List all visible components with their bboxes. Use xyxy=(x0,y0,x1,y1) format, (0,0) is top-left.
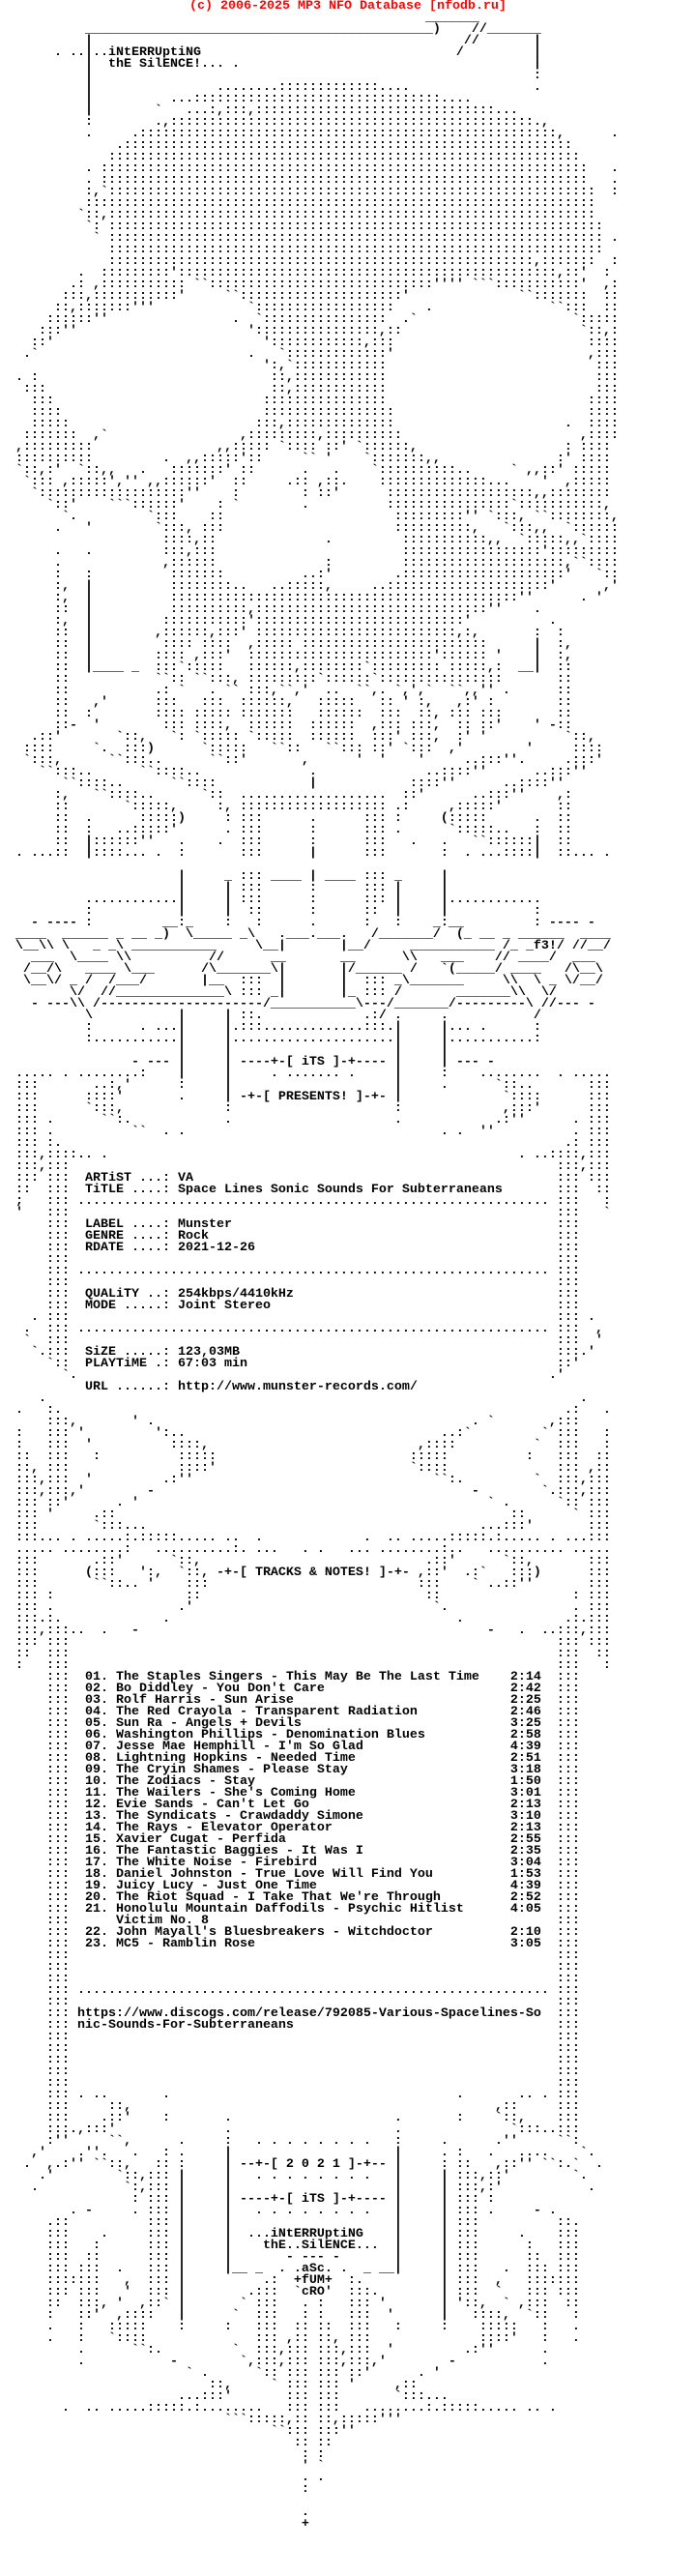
ascii art: skull with tagline: _______ _____________________________________________) //_______ | // | . ..|..iNtERRUptiNG / | | thE SilENCE!... . | | : | ........:::::::::::::.... . | ...::::::::::::::::::::::::::::::::.... | ` ...:,:::,:::::::::::::::::::::::::::::::... : .,:::::::::::::::::::::::::::::::::::::::::::::::., . .::::::::::::::::::::::::::::::::::::::::::::::::::::::, . .:::::::::::::::::::::::::::::::::::::::::::::::::::::::::: ::::::::::::::::::::::::::::::::::::::::::::::::::::::::::::: . ::::::::::::::::::::::::::::::::::::::::::::::::::::::::::::::: . . ::::::::::::::::::::::::::::::::::::::::::::::::::::::::::::::: . :,`::::::::::::::::::::::::::::::::::::::::::::::::::::::::::::::: : :::::::::::::::::::::::::::::::::::::::::::::::::::::::::::::::::: `::,::::::::::::::::::::::::::::::::::::::::::::::::::::::::::::::: `: :::::::::::::::::::::::::::::::::::::::::::::::::::::::::::::::: ` :::::::::::::::::::::::::::::::::::::::::::::::::::::::::::::::: . :::::::::::::::::::::::::::::::::::::::::::::::::::::::::::::::: :::::::::::::::::::::::::::::::::::::::::::::::::::::::,::::::: : . :::::::::':::::::::::::::::::::::::::::::::::::::::::::::::,::' : .: ,::::::::::: ``:::::::::::::::::::::::::::::'''' ```:::::::::::' ,: :::,:::::::::::' ``:::::::::::::::::::::' ``::::::: :: ::,:::::::''' `:::::::::::::::::: . ``::: :: ::::::'' . `:::::::::::::::: .` `::::: :::'' '::::::::::::::::,:: `::,: ::' '::::::::::::,::: :::: .` . `:::::::::::::' ,::: ':,`:::::::::::: ::: . : ::,:::::::::::: ::: ::: ::,:::::::::::: ::: ::: :::::::::::::::: :::: :::: ::::::::::::::::: :::: ::::: :::,:::::::::::::: . :::: ::::::: ,` ,:::::::::,:::::::::: ,:::: ,::::::::: ,,::::: `:::: ::' `::::::, : :::: :::::::::: . ,,:::::':: `` ' `:::::::,, :' :::: `::,:' `::,, . :::::::' :: . . `::::::::::.. ` ,,::' ::::: `::: ,:::::','' ,,::::::' :: .:: ,::. ::::::::::::::... ' ,::::: `:::::::::::::::::::'' : : ::' :::::::::::::::::::,,:::::::: `::' ```::::::' : ` . ::::::::::::::::`:::::::::::, `. `::: :: :::::::::'' `:::, ``::::::::, . ' `:::, ::: ::::::::::, `:::,, `:::::: ::::,:: . :::::::::::,, `:::::,,`:::: . . :::,::: ::::::::::::::::::'::::::::: . ,:::::: : :::::::::::::::::::::,``:::: : : ::::::: ..:' .:::::::::::::::::::::' `:: :, | ::::::::.. ..:::::, ..:::::::::::::::::::::' ,' :, | :::::::::::::::::::::::::::::::::::::::::::::'' . ' :: | ::::::::::,::::::::::::::::::::::::::::::'' . :, | :::::::::::':::::::::::::::::::::::::::' . :: | ,::::::,:::' ::::::::::::::::::::::::::,:, : : :: | :::: :::: ,::::: :::::::::::::::::::::::: | :, :: | :::: ,:::' ::::::::::::::::::::::::':::::: ' | :, :: |____ _ :::`::::: ::::::,::::::::`::::::::: :::::,: __| :: :: ``:: ``:::, :::::::::`::::::`:::::::::::::::: :: :: .: ` . `` :::,``,' .. ``,. `,',` ``,,'' . :: :: ,' ::: ::: ::::::, ::::: :: ' :, ,:' : :: :: : :::: ::::: ::::::: :::::: ::: ::, ::: ::: :: ::- ' ::: ::::, :::::: :::::: ,::: :::, :: ::' ' -:: .::' `::, `: `::::: `::::: :::::: :::' :::, :' ' `::, :::: `. :::) `::::: ``:: ``::: ::' `::: ,' ' :::: `:::, ``:::.. ``::' , ' ' ' ..:::''. .:::' ``:::.. ``::::.. . ..::::'' ..:::'' ``::::.. ``:::: | ::::'' ..::::'' :, ``::::.. `:: ................... ::' ..:::'' ,: :: `:::::, :, ::::::::::::::::::: .: ,:::::' :: :: . :::::) : ::: . ::: : (::::: . :: :: : ..:::::' . ::: : ::: . `:::::.. : :: :: |::::::'' . . ::: : ::: . . ``::::::| :: . ...:: |::::... . : ::: | ::: : . ...::::| ::... . xyxy=(0,11,619,861)
ascii art: closing frame with year, group credit and dagger: ::: ::: ::: ::: ::: ::: ::: ::: ::: ::: ::: . .. . . .. . ::: ::: ::, ,:: ::: ::: .::' : . . : `::, ::: :::.,:::' . . `:::..::: :'' ``, . : . . . . . . . . : . .'' ``: ,' .''. . : . | | . : . .... `. . ,.:'' ``::, :: : | --+-[ 2 0 2 1 ]-+-- | : :: ,::'' ``:.` . .' `::,::: | | . . . . . . . . | | :::,::' `. . `:,::: | | | | :::,:' . : ::: | | ----+-[ iTS ]-+---- | | ::: : . - . ::: | | . . . . . . . . | | ::: . - . .:: ::: | | | | ::: ::. ::: . ::: | | ...iNtERRUptiNG | | ::: . ::: ::: : ::: | | thE..SilENCE... | | ::: : ::: ::: :: ::: | | - --- - | | ::: :: ::: ::: ::: . ::: | |__ _ . .aSc. . _ __| | ::: . ::: ::: ::::::: , ::: | .: +fUM+ :. | ::: , ::::::: ::: ::: ' ::: | .::: `cRO' :::. | ::: ` ::: ::: :: :::, ' ,::` | ` ::: . : ::: ' | '::, ` ,::: :: : ::' ,:::: | ` ::: : : ::: ' | ::::, `:: : . : ::::: : : ::: :: :: ::: : : ::::: : . . : `:::: ::: ,:: ::, ::: ::::' : . . ``:. ` :::,::: :::,::: ' .:'' . . - `,:::,::: :::,:::,' - . ` . `:: ::: ::: ::' . ' ::, ` ::: ::: ' ,:: ...:::' ::: ::: `:::... . .. .....:::::.:........ ::: ::: ........:.:::::..... .. . ```:::::,:: ::,:::::''' ``::: :::'' :: :: : : ' ` . . : . + xyxy=(0,2030,603,2532)
ascii art: tracks and notes heading: . . . :. .: . :::, ' . . ` ,::: : ::: ' ':.. ..:` ` ::: : : ::: ' ::::, ,:::: ` ::: : :: ::: : ::::: ::::: : ::: :: ::, ::: ::::' `:::: ::: ,:: :::,::: ' .:'' ``:. ` :::,::: :::,:::,' - - `.:::,::: ::: ::' . ' ` . `:: ::: ::: ' .:: :: ` ::: ::: `:::... ...:::' ::: :::... . .....:.:::::..... .. . . .. .....:::::.:..... . ...::: ..... ........: ..........:. ... . . ... ........:.. .......... ..... ::: .::' `::, .::' `::, ::: ::: (::: ':, `::, -+-[ TRACKS & NOTES! ]-+- ,::' .:` :::) ::: ::: ``::.. ' ::: ::: ` ..::'' ::: ::: : :: :: : ::: ::: . .' `. . ::: :::.:. . . .:.::: :::,:::.. . - - . ..:::,::: ::: ::: ::: ::: :: ::: ::: :: : ::: ::: : xyxy=(0,1391,611,1673)
track list with discogs link: ::: 01. The Staples Singers - This May Be The Last Time 2:14 ::: ::: 02. Bo Diddley - You Don't Care 2:42 ::: ::: 03. Rolf Harris - Sun Arise 2:25 ::: ::: 04. The Red Crayola - Transparent Radiation 2:46 ::: ::: 05. Sun Ra - Angels + Devils 3:25 ::: ::: 06. Washington Phillips - Denomination Blues 2:58 ::: ::: 07. Jesse Mae Hemphill - I'm So Glad 4:39 ::: ::: 08. Lightning Hopkins - Needed Time 2:51 ::: ::: 09. The Cryin Shames - Please Stay 3:18 ::: ::: 10. The Zodiacs - Stay 1:50 ::: ::: 11. The Wailers - She's Coming Home 3:01 ::: ::: 12. Evie Sands - Can't Let Go 2:13 ::: ::: 13. The Syndicats - Crawdaddy Simone 3:10 ::: ::: 14. The Rays - Elevator Operator 2:13 ::: ::: 15. Xavier Cugat - Perfida 2:55 ::: ::: 16. The Fantastic Baggies - It Was I 2:35 ::: ::: 17. The White Noise - Firebird 3:04 ::: ::: 18. Daniel Johnston - True Love Will Find You 1:53 ::: ::: 19. Juicy Lucy - Just One Time 4:39 ::: ::: 20. The Riot Squad - I Take That We're Through 2:52 ::: ::: 21. Honolulu Mountain Daffodils - Psychic Hitlist 4:05 ::: ::: Victim No. 8 ::: ::: 22. John Mayall's Bluesbreakers - Witchdoctor 2:10 ::: ::: 23. MC5 - Ramblin Rose 3:05 ::: ::: ::: ::: ::: ::: ::: ::: ............................................................. ::: ::: ::: ::: https://www.discogs.com/release/792085-Various-Spacelines-So ::: ::: nic-Sounds-For-Subterraneans ::: xyxy=(0,1670,580,2033)
ascii art: logo banner with presents box: | _ ::: ____ | ____ ::: _ | | | ::: : ::: | | ............| | ::: : ::: | |............ : | | :: : :: | | : - ---- : __:_ : : . : : _:__ : ---- - ____ ______ _ __ _) \_____ _\ .___.___. /_______/ (_ __ _ ______ ____ \__\\ \ _ _\ ___________ \__| |__/ ___________ /_ _f3!/ //__/ ___ \____ \\ // __ __ \\ ___ // ____/ ___ /__/\ ____ \___ /\_______\| |/______ / `(_____/ ____ /\__\ \__\/ _ / /___/ |__ ::: | | ::: _\_______ \\ \ _ \/__/ \/ //______________\ ::: _| |_ ::: / _______\\ \/ - ---\\ /---------------------/___________\---/_______/---------\ //--- - \ | | ::. .:/ . . / : . ...| |.:::.............:::.| |... . : :...........| |.....................| |...........: | | | | - --- | | ----+-[ iTS ]-+---- | | --- - ..... . ........: | | . ....... . | : ........ . ..... ::: ..:,' : | | . `::.. ::: ::: ::::' . | -+-[ PRESENTS! ]-+- | `:::: ::: ::: `:::, : : ,:::' ::: ::: . ``:. . . .:'' . ::: ::: . `` . . . . '' . ::: ::: :. .: ::: :::,::::.. . . ..::::,::: xyxy=(0,869,611,1162)
release info block: :::,::: :::,::: ::: ::: ARTiST ...: VA ::: ::: :: ::: TiTLE ....: Space Lines Sonic Sounds For Subterraneans ::: :: ; ::: ............................................................. ::: : ' ::: ::: ` ::: LABEL ....: Munster ::: ::: GENRE ....: Rock ::: ::: RDATE ....: 2021-12-26 ::: ::: ::: ::: ............................................................. ::: ::: ::: ::: QUALiTY ..: 254kbps/4410kHz ::: ::: MODE .....: Joint Stereo ::: . ::: ::: . . ::: ............................................................. ::: , ` ::: ::: ' `.::: SiZE .....: 123,03MB :::.' `:: PLAYTiME .: 67:03 min ::' `. .' URL ......: http://www.munster-records.com/ xyxy=(0,1159,611,1394)
